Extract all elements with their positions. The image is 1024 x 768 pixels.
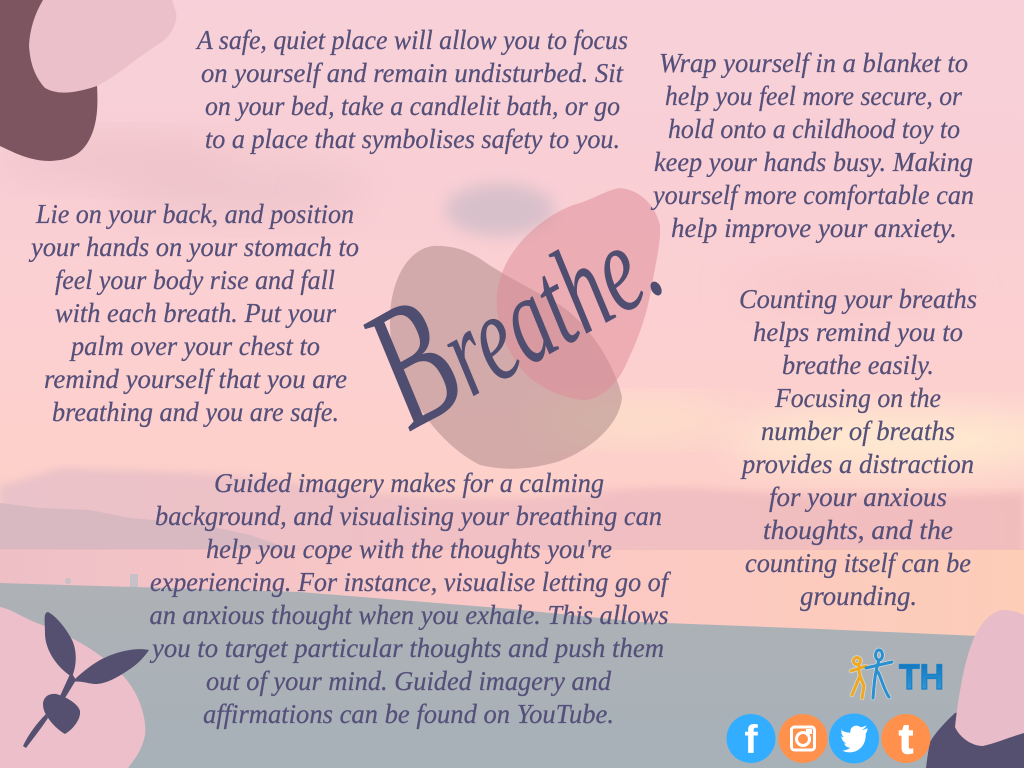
text block: counting breaths: thoughts, and the xyxy=(763,515,953,545)
text block: guided imagery: affirmations can be found on YouTube. xyxy=(203,699,614,729)
text block: counting breaths: Counting your breaths xyxy=(739,284,977,314)
text block: counting breaths: grounding. xyxy=(800,581,917,611)
icon: orange figure xyxy=(851,658,866,698)
text block: blanket and toy xyxy=(650,48,974,243)
icon: tumblr xyxy=(882,714,930,763)
shape: bottom-right pink blob xyxy=(955,610,1024,746)
text block: lie on your back: feel your body rise and fall xyxy=(55,265,335,295)
text block: guided imagery: Guided imagery makes for a calming xyxy=(214,468,604,498)
shape: bottom-right dark blob xyxy=(926,700,1024,768)
text block: safe quiet place: A safe, quiet place will allow you to focus xyxy=(195,25,628,55)
shape: centre rose blob xyxy=(497,188,660,400)
icon: facebook: f xyxy=(744,718,758,762)
text block: lie on your back: your hands on your stomach to xyxy=(28,232,359,262)
logo: TH figures and letters xyxy=(851,650,944,698)
icon: leaf sprig xyxy=(23,612,149,748)
text block: guided imagery: an anxious thought when you exhale. This allows xyxy=(150,600,668,630)
shape: top-left dark blob xyxy=(0,0,97,161)
text block: counting breaths: helps remind you to xyxy=(753,317,963,347)
logo letters: TH xyxy=(899,658,944,697)
text block: lie on your back: breathing and you are safe. xyxy=(52,397,339,427)
text block: lie on your back xyxy=(28,199,359,427)
shape: centre mauve blob xyxy=(390,246,622,469)
text block: guided imagery: background, and visualising your breathing can xyxy=(155,501,662,531)
text block: guided imagery: experiencing. For instance, visualise letting go of xyxy=(150,567,671,597)
text block: counting breaths xyxy=(739,284,977,611)
text block: counting breaths: number of breaths xyxy=(761,416,955,446)
text block: counting breaths: provides a distraction xyxy=(740,449,974,479)
shape: bottom-left pink blob xyxy=(0,607,145,768)
text block: blanket and toy: yourself more comfortable can xyxy=(650,180,974,210)
text block: counting breaths: breathe easily. xyxy=(782,350,934,380)
text block: blanket and toy: help improve your anxiety. xyxy=(671,213,957,243)
text block: lie on your back: palm over your chest to xyxy=(69,331,320,361)
text block: counting breaths: counting itself can be xyxy=(745,548,971,578)
icon: twitter xyxy=(829,714,879,764)
icon: facebook xyxy=(726,714,776,763)
text block: blanket and toy: hold onto a childhood toy to xyxy=(668,114,960,144)
text block: counting breaths: Focusing on the xyxy=(774,383,941,413)
text block: guided imagery: you to target particular thoughts and push them xyxy=(149,633,664,663)
text block: safe quiet place: to a place that symbolises safety to you. xyxy=(205,124,620,154)
icon: tumblr: t xyxy=(899,715,913,762)
text block: safe quiet place: on yourself and remain undisturbed. Sit xyxy=(201,58,624,88)
icon: blue figure xyxy=(866,650,892,698)
text block: lie on your back: with each breath. Put your xyxy=(55,298,336,328)
title: Breathe script: Breathe. xyxy=(333,150,688,466)
shape: top-left pink blob xyxy=(29,0,176,93)
text block: lie on your back: remind yourself that you are xyxy=(44,364,347,394)
text block: blanket and toy: Wrap yourself in a blanket to xyxy=(659,48,968,78)
text block: blanket and toy: help you feel more secure, or xyxy=(665,81,962,111)
text block: counting breaths: for your anxious xyxy=(769,482,947,512)
text block: lie on your back: Lie on your back, and position xyxy=(35,199,354,229)
text block: blanket and toy: keep your hands busy. Making xyxy=(654,147,973,177)
icon: instagram xyxy=(778,714,828,763)
text block: guided imagery: out of your mind. Guided imagery and xyxy=(206,666,611,696)
text block: safe quiet place xyxy=(195,25,628,154)
text block: guided imagery xyxy=(149,468,671,729)
text block: safe quiet place: on your bed, take a candlelit bath, or go xyxy=(205,91,620,121)
text block: guided imagery: help you cope with the thoughts you're xyxy=(206,534,612,564)
